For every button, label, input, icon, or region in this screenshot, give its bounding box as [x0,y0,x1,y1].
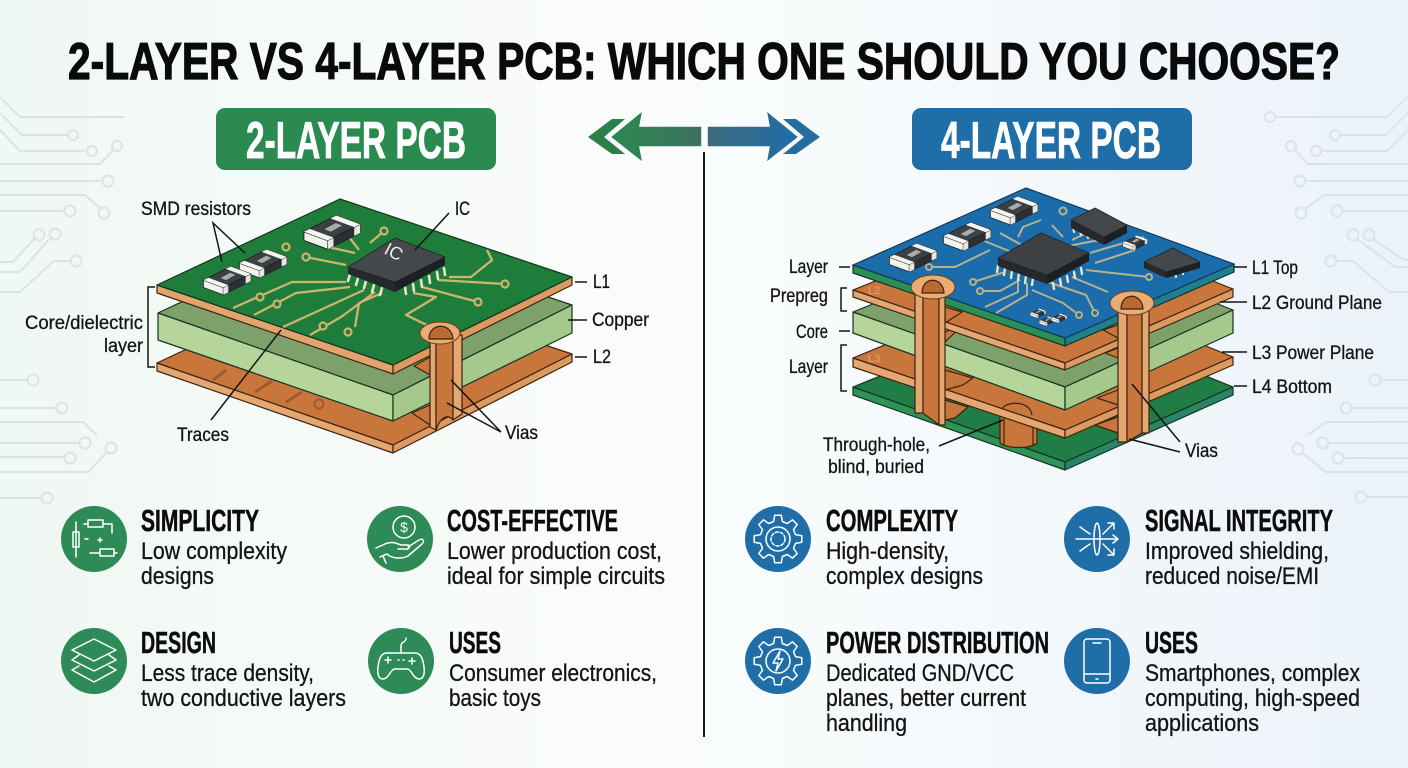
layer: L3 power plane: L3 [868,353,880,365]
diagram: 4-layer PCB stack [853,188,1234,470]
layer: L2 ground plane [853,214,1233,370]
feature: signal integrity: Improved shielding, [1145,538,1329,565]
feature: power distribution [745,625,1049,737]
feature: cost-effective: Lower production cost, [447,538,662,565]
layer: L1 top board [853,188,1234,346]
feature: uses 2-layer: Consumer electronics, [449,660,657,687]
diagram: 2-layer PCB stack [157,199,572,453]
label: Vias left: Vias [505,423,538,444]
small chip right [1144,248,1200,278]
icon: signal arrows [1064,506,1130,572]
label: Layer lower: Layer [789,357,829,378]
icon: gear [745,506,811,572]
via right [1110,291,1154,442]
feature: complexity [745,503,983,590]
label: L1 Top: L1 Top [1252,258,1298,279]
label: L1 Top [1234,258,1298,279]
icon: power gear [745,628,811,694]
icon: hand with coin: $ [400,519,408,535]
feature: design: two conductive layers [141,685,346,712]
SMD resistors [889,196,1147,326]
label: Vias left [447,380,538,444]
feature: power distribution: Dedicated GND/VCC [826,660,1014,687]
arrow: left [588,110,702,163]
layer: core dielectric [158,227,572,425]
traces [926,208,1152,318]
label: Traces: Traces [177,425,229,446]
feature: uses 4-layer: applications [1145,710,1259,737]
label: Core: Core [796,322,828,343]
label: SMD resistors: SMD resistors [141,199,251,220]
layer: L2 copper [157,277,572,453]
feature: power distribution: POWER DISTRIBUTION [826,625,1049,660]
feature: uses 2-layer [368,625,657,712]
layer: L3 power plane [853,280,1233,438]
label: IC [415,199,470,250]
bracket: core/dielectric [148,287,155,367]
feature: power distribution: planes, better current [826,685,1026,712]
badge: 2-layer PCB [216,108,496,170]
label: Layer lower [789,345,847,391]
icon: circuit [61,506,127,572]
icon: hand with coin [367,506,433,572]
traces [233,228,508,336]
feature: simplicity: designs [141,563,214,590]
circuit decoration left [0,97,125,504]
feature: complexity: complex designs [826,563,983,590]
IC chip: IC [381,239,406,265]
label: core/dielectric layer [25,313,144,357]
label: Through-hole, blind, buried: Through-hole, [823,435,930,456]
buried via [1000,414,1037,448]
layer: L1 top board [157,199,572,375]
feature: signal integrity: reduced noise/EMI [1145,563,1319,590]
feature: cost-effective: ideal for simple circuits [447,563,665,590]
label: Traces [177,330,281,446]
via left [911,275,955,425]
label: core/dielectric layer: layer [104,336,144,357]
label: L2 Ground Plane: L2 Ground Plane [1252,293,1382,314]
label: L1: L1 [593,272,610,293]
SMD resistors [203,216,360,295]
feature: power distribution: handling [826,710,907,737]
center divider [703,152,705,737]
feature: design: DESIGN [141,625,216,660]
feature: design: Less trace density, [141,660,314,687]
label: L2: L2 [593,347,611,368]
layer: L2 ground plane: L2 [868,285,880,297]
circuit decoration right [1265,97,1408,502]
icon: stacked layers [61,628,127,694]
IC chip [348,238,445,295]
feature: uses 2-layer: basic toys [449,685,541,712]
layer: core [853,235,1233,410]
label: Vias right: Vias [1185,441,1218,462]
small chip top [1071,208,1127,245]
label: IC: IC [455,199,470,220]
icon: game controller [368,628,434,694]
badge: 2-layer PCB: 2-LAYER PCB [246,112,466,170]
label: L1 [575,272,610,293]
feature: uses 4-layer: computing, high-speed [1145,685,1360,712]
via [420,322,462,430]
label: L4 Bottom: L4 Bottom [1252,377,1332,398]
main chip [997,233,1089,289]
feature: simplicity [61,503,287,590]
label: Through-hole, blind, buried [823,420,1003,478]
feature: signal integrity [1064,503,1333,590]
arrow: right [707,110,820,163]
label: L2 [575,347,611,368]
label: Through-hole, blind, buried: blind, buried [828,457,924,478]
feature: uses 4-layer [1064,625,1360,737]
label: Copper [568,310,650,331]
layer: L4 bottom [853,310,1233,470]
feature: uses 4-layer: USES [1145,625,1198,660]
feature: uses 2-layer: USES [449,625,501,660]
label: Layer top: Layer [789,257,829,278]
feature: design [61,625,346,712]
icon: smartphone [1064,628,1130,694]
badge: 4-layer PCB [912,108,1192,170]
feature: complexity: COMPLEXITY [826,503,958,538]
label: L3 Power Plane: L3 Power Plane [1252,343,1374,364]
badge: 4-layer PCB: 4-LAYER PCB [941,112,1161,170]
label: SMD resistors [141,199,251,262]
label: Copper: Copper [592,310,650,331]
feature: simplicity: SIMPLICITY [141,503,259,538]
feature: cost-effective: COST-EFFECTIVE [447,503,618,538]
feature: complexity: High-density, [826,538,949,565]
feature: cost-effective [367,503,665,590]
feature: simplicity: Low complexity [141,538,287,565]
label: Vias right [1129,384,1218,462]
feature: uses 4-layer: Smartphones, complex [1145,660,1360,687]
label: core/dielectric layer: Core/dielectric [25,313,143,334]
label: Prepreg: Prepreg [770,286,828,307]
